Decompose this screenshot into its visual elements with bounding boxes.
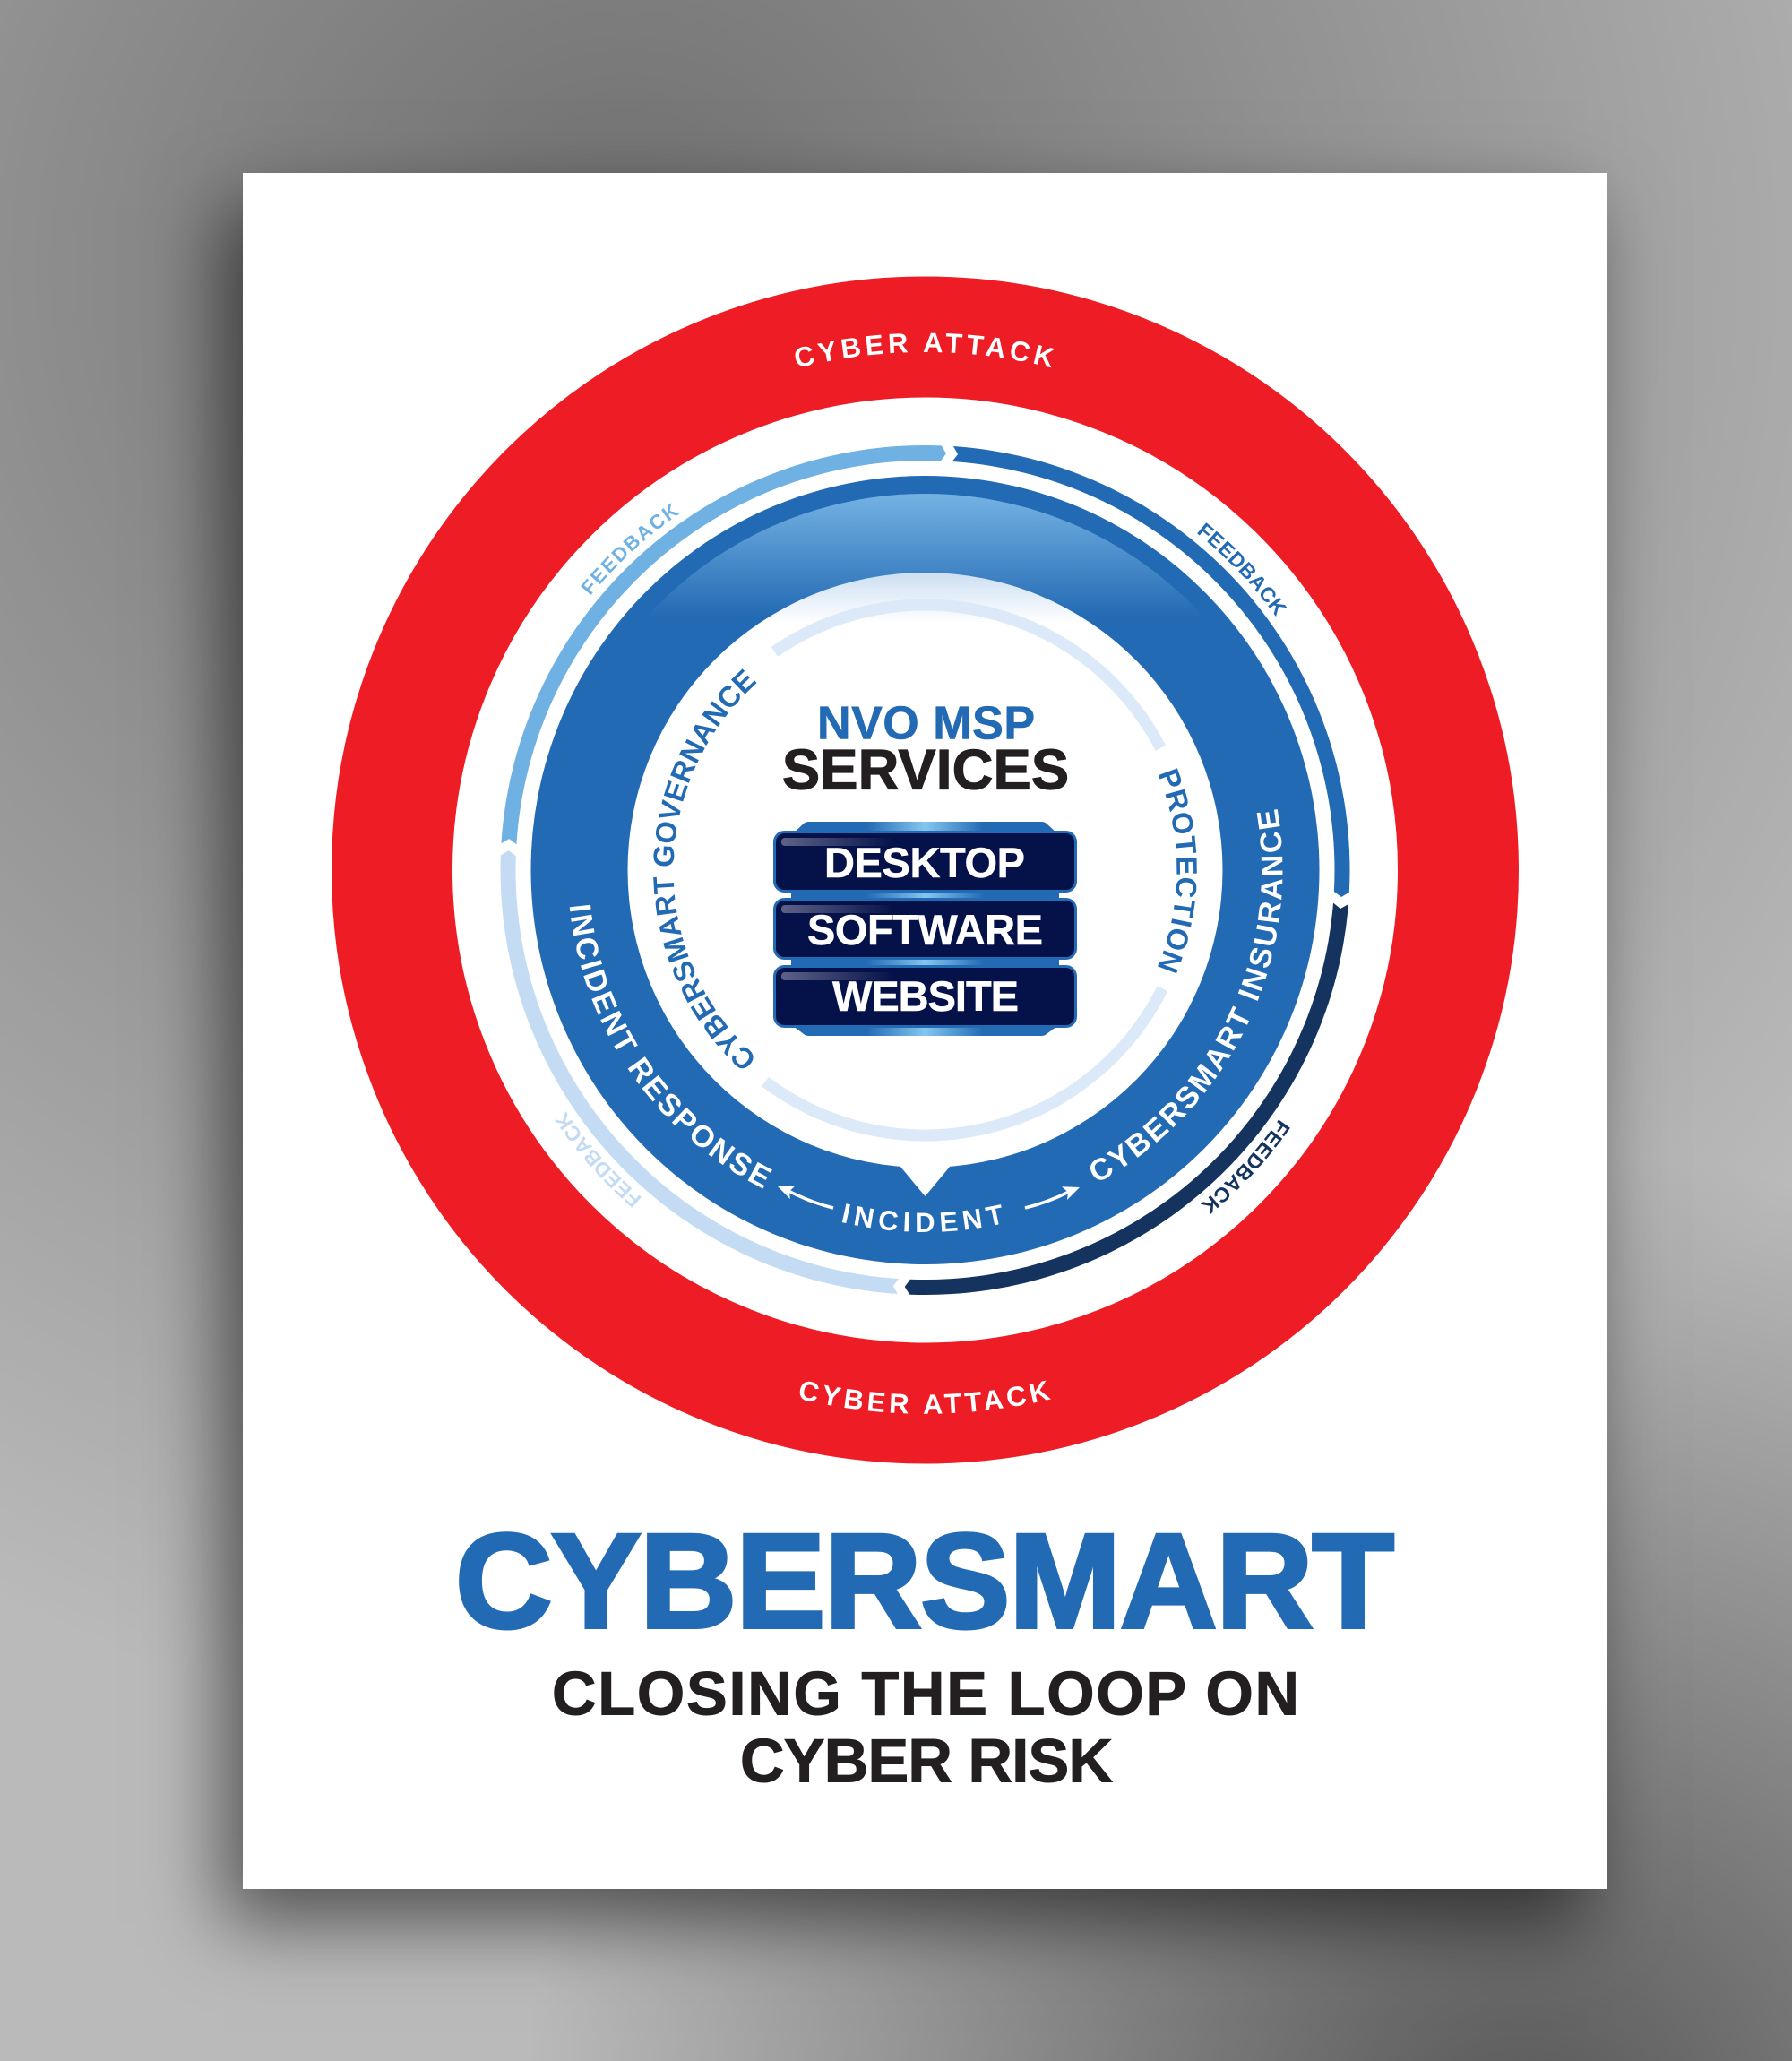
website row: WEBSITE	[832, 972, 1019, 1020]
lower pale arc	[765, 988, 1162, 1135]
label: feedback top right: FEEDBACK	[1197, 522, 1287, 617]
connector	[791, 891, 1059, 900]
bottom cap	[793, 1026, 1057, 1036]
subtitle line two: CYBER RISK	[740, 1726, 1113, 1796]
connector	[791, 958, 1059, 967]
arrow arc: blue feedback	[952, 446, 1349, 897]
upper pale arc	[774, 605, 1160, 748]
white poster sheet	[243, 173, 1607, 1889]
arrow arc: light blue feedback	[501, 445, 946, 844]
label: feedback top left: FEEDBACK	[581, 503, 679, 595]
server stack	[774, 822, 1075, 1036]
feedback loop ring	[500, 445, 1349, 1295]
red band	[392, 337, 1459, 1403]
label: feedback bottom right: FEEDBACK	[1201, 1120, 1290, 1215]
label: incident response: INCIDENT RESPONSE	[570, 905, 772, 1188]
software row: SOFTWARE	[807, 906, 1043, 953]
arrow: incident to response	[778, 1186, 833, 1208]
label: protection: PROTECTION	[1158, 768, 1197, 973]
blue response band	[530, 476, 1319, 1264]
title: cybersmart: CYBERSMART	[455, 1505, 1394, 1656]
label: top cyber attack: CYBER ATTACK	[796, 333, 1055, 367]
incident pointer notch	[896, 1161, 954, 1196]
label: bottom cyber attack: CYBER ATTACK	[799, 1380, 1051, 1414]
inner services loop	[653, 599, 1197, 1142]
arrow arc: pale blue feedback	[501, 850, 899, 1294]
label: feedback bottom left: FEEDBACK	[554, 1111, 642, 1208]
top cap	[793, 822, 1057, 833]
website row	[774, 966, 1075, 1027]
subtitle line one: CLOSING THE LOOP ON	[552, 1660, 1299, 1728]
nvo msp: NVO MSP	[817, 697, 1035, 749]
desktop row: DESKTOP	[824, 839, 1025, 886]
software row	[774, 900, 1075, 959]
blue disc	[530, 476, 1319, 1264]
heading: nvo msp services	[782, 697, 1069, 801]
label: cybersmart governance: CYBERSMART GOVERNANCE	[653, 668, 756, 1068]
title block	[455, 1505, 1394, 1796]
arrow arc: navy feedback	[905, 903, 1348, 1295]
red cyber attack ring	[357, 290, 1495, 1457]
label: cybersmart insurance: CYBERSMART INSURANCE	[1090, 809, 1283, 1180]
desktop row	[774, 832, 1075, 891]
arrow: incident to insurance	[1025, 1186, 1080, 1208]
white centre disc	[627, 573, 1222, 1168]
glossy top highlight	[548, 494, 1301, 1246]
services: SERVICES	[782, 738, 1069, 801]
label: incident: INCIDENT	[842, 1203, 1002, 1232]
